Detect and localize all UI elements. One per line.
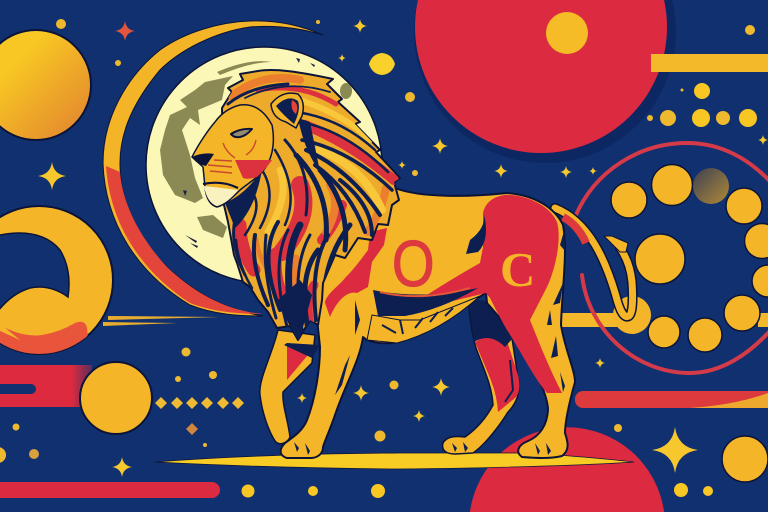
planet: top left — [0, 30, 91, 140]
planet: large red with halo — [414, 0, 676, 163]
lion: far front leg — [260, 330, 320, 444]
lion: ear — [271, 93, 303, 128]
diamonds row — [155, 397, 244, 409]
planet: bottom right yellow — [722, 436, 768, 482]
lion: body and near legs — [281, 188, 575, 458]
bottom left red bar — [0, 482, 220, 498]
lion — [192, 70, 633, 458]
horizontal yellow bars — [561, 313, 768, 327]
lion: haunch red — [427, 195, 562, 393]
lion: eye — [231, 129, 252, 137]
lion: O marking: O — [392, 228, 434, 300]
planet: lower left — [80, 362, 152, 434]
red bar with pill — [0, 365, 92, 407]
crescent — [103, 21, 323, 316]
lion: cheek red — [235, 160, 272, 179]
lion: leg markings — [294, 231, 565, 455]
streaks: left — [103, 316, 220, 326]
ground streak — [155, 453, 634, 469]
lion: nose — [192, 153, 214, 166]
planet: bottom red — [470, 427, 664, 512]
lion: tail — [555, 208, 633, 317]
lion: C marking: C — [500, 242, 535, 297]
lion: muzzle — [204, 186, 238, 206]
lion: mane — [222, 70, 400, 345]
lion: far hind leg — [443, 298, 519, 454]
ring of circles — [575, 143, 768, 373]
bar: lower right red — [575, 391, 768, 408]
lion: belly shadow — [367, 214, 486, 343]
bar: top right yellow — [651, 54, 768, 72]
moon — [146, 47, 382, 283]
left C shape — [0, 206, 113, 360]
lion: mouth — [203, 183, 238, 188]
lion: head — [192, 93, 303, 207]
lion: shoulder red — [325, 228, 387, 317]
